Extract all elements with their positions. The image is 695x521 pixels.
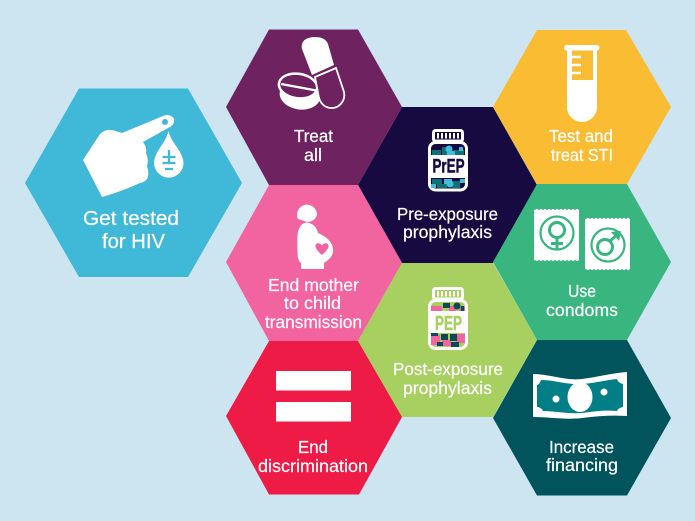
label: treat all: all: [304, 145, 322, 165]
label: end mother to child transmission: to child: [284, 293, 341, 313]
icon: PrEP bottle: [430, 130, 466, 190]
panel: post-exposure prophylaxis: [358, 263, 537, 417]
label: test and treat STI: Test and: [549, 126, 613, 146]
label: test and treat STI: treat STI: [551, 145, 613, 165]
label: use condoms: Use: [568, 281, 596, 301]
icon: banknote: [533, 372, 627, 419]
label: treat all: Treat: [294, 126, 333, 146]
icon: PEP bottle: PEP: [435, 313, 462, 335]
label: get tested for HIV: for HIV: [102, 231, 166, 253]
label: get tested for HIV: [83, 208, 179, 253]
label: test and treat STI: [549, 126, 613, 165]
icon: finger and blood drop: [83, 115, 184, 197]
panel: treat all: [226, 30, 402, 185]
icon: tablet and capsule: [276, 37, 344, 112]
label: use condoms: [546, 281, 618, 320]
icon: equals sign: [276, 371, 351, 422]
label: end mother to child transmission: transmission: [265, 312, 362, 332]
label: end discrimination: [258, 437, 368, 476]
label: end mother to child transmission: [265, 275, 362, 332]
panel: use condoms: [493, 184, 671, 340]
panel: increase financing: [493, 340, 671, 496]
label: post-exposure prophylaxis: Post-exposure: [393, 359, 503, 379]
label: end mother to child transmission: End mother: [268, 275, 359, 295]
label: post-exposure prophylaxis: prophylaxis: [403, 378, 492, 398]
label: treat all: [294, 126, 333, 165]
label: get tested for HIV: Get tested: [83, 208, 179, 230]
label: use condoms: condoms: [546, 300, 618, 320]
panel: end discrimination: [226, 341, 402, 494]
icon: male condom pack: [585, 218, 630, 270]
panel: get tested for HIV: [25, 88, 242, 277]
label: end discrimination: discrimination: [258, 456, 368, 476]
panel: end mother to child transmission: [226, 185, 402, 341]
label: post-exposure prophylaxis: [393, 359, 503, 398]
label: pre-exposure prophylaxis: prophylaxis: [403, 222, 492, 242]
label: increase financing: financing: [546, 455, 618, 475]
label: increase financing: [546, 437, 618, 475]
icon: PrEP bottle: PrEP: [432, 156, 465, 178]
icon: PEP bottle: [430, 288, 466, 348]
icon: female condom pack: [534, 209, 579, 261]
icon: pregnant woman: [297, 205, 333, 269]
label: pre-exposure prophylaxis: Pre-exposure: [397, 204, 498, 224]
panel: test and treat STI: [493, 30, 671, 184]
label: pre-exposure prophylaxis: [397, 204, 498, 242]
label: increase financing: Increase: [549, 437, 614, 457]
panel: pre-exposure prophylaxis: [358, 107, 537, 263]
icon: test tube: [564, 45, 600, 122]
label: end discrimination: End: [298, 437, 328, 457]
